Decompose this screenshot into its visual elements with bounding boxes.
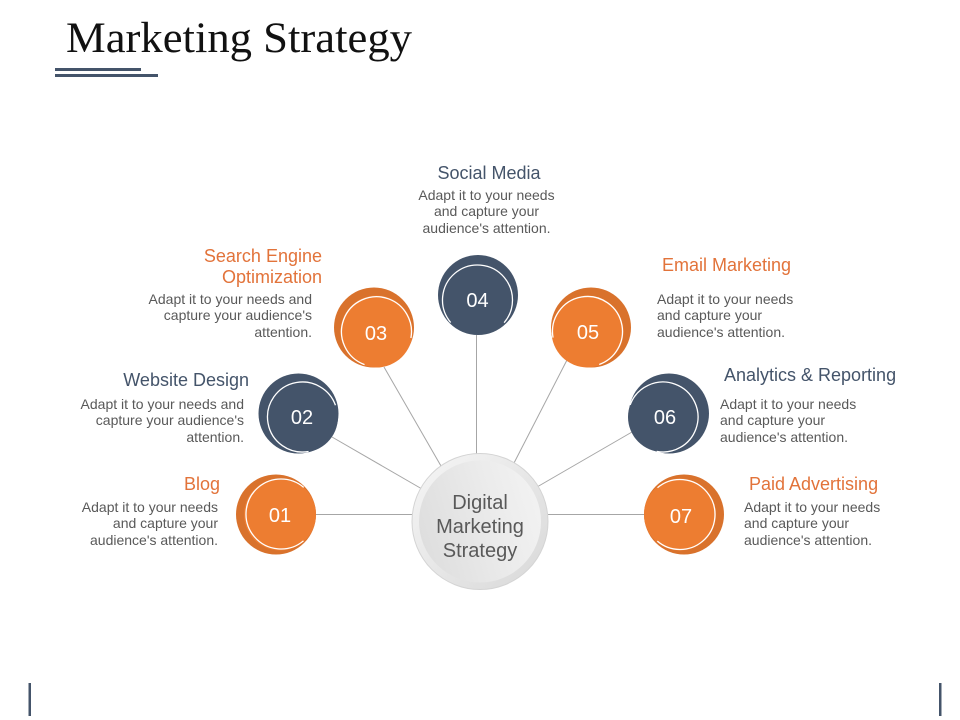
node 05: 05	[577, 322, 599, 344]
text block: Search Engine Optimization: capture your audience's	[164, 307, 312, 323]
text block: Search Engine Optimization: attention.	[254, 324, 312, 340]
node 06: 06	[654, 407, 676, 429]
text block: Website Design	[81, 370, 249, 445]
text block: Email Marketing	[657, 255, 793, 340]
footer right bar	[939, 683, 942, 716]
node 01	[232, 465, 330, 563]
central hub: Digital	[452, 492, 508, 514]
node 07: 07	[670, 506, 692, 528]
text block: Analytics & Reporting: audience's attention.	[720, 429, 848, 445]
text block: Blog: audience's attention.	[90, 532, 218, 548]
central hub: Marketing	[436, 516, 524, 538]
text block: Website Design: attention.	[186, 429, 244, 445]
node 03	[332, 287, 421, 377]
node 02: 02	[291, 407, 313, 429]
node 07	[631, 465, 729, 564]
text block: Paid Advertising	[744, 474, 880, 548]
node 05	[547, 288, 631, 372]
text block: Email Marketing: and capture your	[657, 307, 762, 323]
node 01: 01	[269, 505, 291, 527]
connector lines	[316, 335, 644, 514]
text block: Email Marketing: audience's attention.	[657, 324, 785, 340]
footer left bar	[28, 683, 31, 716]
text block: Website Design: Website Design	[123, 370, 249, 390]
central hub	[412, 454, 548, 590]
text block: Analytics & Reporting: Analytics & Reporting	[724, 365, 896, 385]
text block: Blog	[82, 474, 220, 548]
text block: Email Marketing: Adapt it to your needs	[657, 291, 793, 307]
text block: Analytics & Reporting: Adapt it to your needs	[720, 396, 856, 412]
text block: Search Engine Optimization: Search Engine	[204, 246, 322, 266]
text block: Search Engine Optimization: Optimization	[222, 267, 322, 287]
text block: Social Media: and capture your	[434, 203, 539, 219]
title: Marketing Strategy	[66, 15, 413, 62]
node 03: 03	[365, 323, 387, 345]
text block: Analytics & Reporting	[720, 365, 896, 445]
central hub: Strategy	[443, 540, 517, 562]
node 02	[258, 374, 343, 458]
text block: Social Media: Adapt it to your needs	[418, 187, 555, 203]
node 04: 04	[466, 290, 489, 312]
text block: Website Design: Adapt it to your needs and	[81, 396, 244, 412]
text block: Email Marketing: Email Marketing	[662, 255, 791, 275]
text block: Blog: Adapt it to your needs	[82, 499, 218, 515]
text block: Analytics & Reporting: and capture your	[720, 412, 825, 428]
text block: Website Design: capture your audience's	[96, 412, 244, 428]
text block: Paid Advertising: Paid Advertising	[749, 474, 878, 494]
text block: Blog: Blog	[184, 474, 220, 494]
text block: Paid Advertising: Adapt it to your needs	[744, 499, 880, 515]
text block: Search Engine Optimization	[149, 246, 322, 340]
node 04	[428, 251, 527, 349]
text block: Paid Advertising: audience's attention.	[744, 532, 872, 548]
text block: Paid Advertising: and capture your	[744, 515, 849, 531]
text block: Social Media: Social Media	[437, 163, 542, 183]
text block: Social Media: audience's attention.	[422, 220, 550, 236]
text block: Search Engine Optimization: Adapt it to your needs and	[149, 291, 312, 307]
title underline	[55, 68, 158, 77]
text block: Social Media	[418, 163, 555, 236]
node 06	[618, 372, 709, 462]
text block: Blog: and capture your	[113, 515, 218, 531]
